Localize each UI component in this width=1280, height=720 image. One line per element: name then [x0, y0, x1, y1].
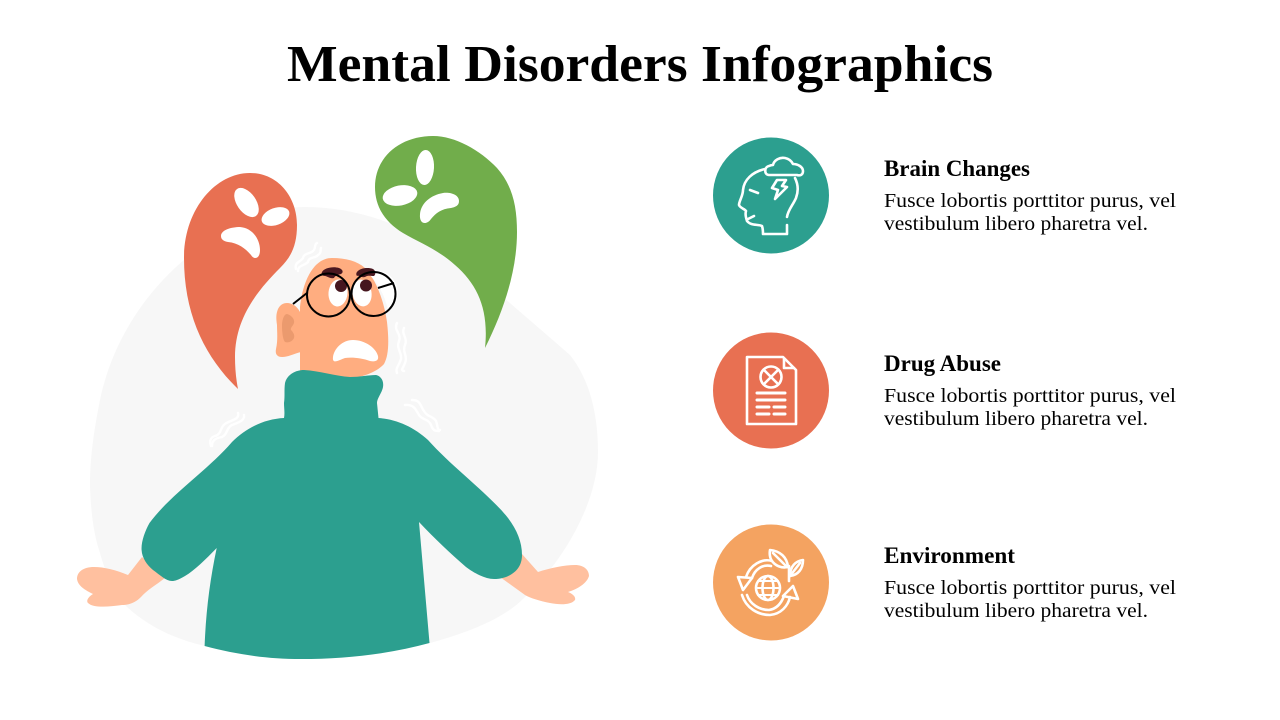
- description: [884, 577, 1176, 622]
- heading: Drug Abuse: [884, 351, 1001, 376]
- glasses: [293, 272, 396, 316]
- mouth: [333, 340, 378, 361]
- description: vestibulum libero pharetra vel.: [884, 600, 1148, 622]
- green thought drop: [375, 136, 517, 348]
- left hand: [77, 557, 165, 607]
- item: drug abuse: [713, 332, 1176, 448]
- illustration: worried man with speech drops: [77, 136, 598, 659]
- red thought drop: [184, 173, 297, 389]
- heading: Environment: [884, 543, 1015, 568]
- description: [884, 190, 1176, 235]
- heading: Brain Changes: [884, 156, 1030, 181]
- head: [293, 258, 398, 379]
- description: vestibulum libero pharetra vel.: [884, 408, 1148, 430]
- background blob: [90, 207, 598, 646]
- icon: globe with recycling arrows and leaves: [713, 524, 829, 640]
- title: Mental Disorders Infographics: [287, 36, 993, 93]
- description: vestibulum libero pharetra vel.: [884, 213, 1148, 235]
- sweater: [142, 370, 522, 659]
- description: [884, 385, 1176, 430]
- right lens highlight: [367, 271, 398, 311]
- eyebrows: [322, 267, 375, 278]
- description: Fusce lobortis porttitor purus, vel: [884, 190, 1176, 212]
- description: Fusce lobortis porttitor purus, vel: [884, 385, 1176, 407]
- item: brain changes: [713, 138, 1176, 254]
- description: Fusce lobortis porttitor purus, vel: [884, 577, 1176, 599]
- shake lines: [210, 243, 440, 446]
- ear: [276, 303, 301, 357]
- right hand: [500, 554, 589, 604]
- icon: document with crossed syringe: [713, 332, 829, 448]
- icon: head with storm cloud: [713, 138, 829, 254]
- item: environment: [713, 524, 1176, 640]
- left eye: [327, 279, 349, 307]
- right eye: [350, 278, 374, 308]
